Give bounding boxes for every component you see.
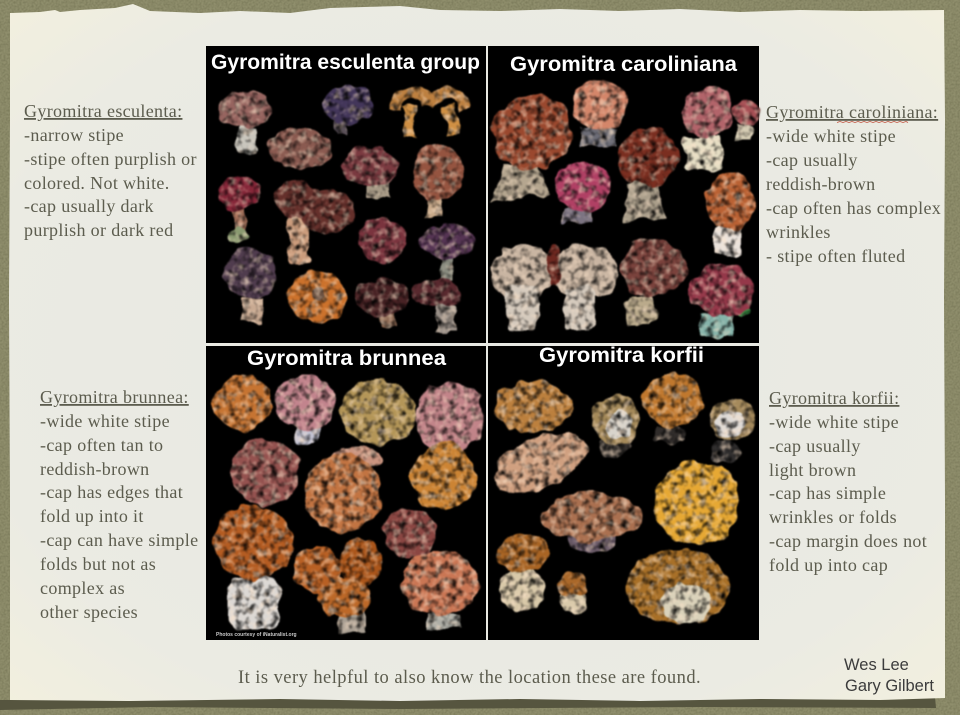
mushrooms: caroliniana <box>490 80 761 336</box>
text block: korfii notes: Gyromitra korfii: <box>769 388 899 408</box>
panel: Gyromitra brunnea <box>206 346 486 640</box>
mushrooms: korfii <box>484 373 756 625</box>
text block: brunnea notes: reddish-brown <box>40 459 150 479</box>
mushroom 1 <box>214 374 270 432</box>
mushroom 9 <box>620 239 686 324</box>
mushroom 5 <box>709 399 756 464</box>
mushroom 1 <box>494 381 572 433</box>
mushroom 14 <box>412 278 462 332</box>
mushroom 9 <box>357 217 407 263</box>
text block: korfii notes <box>769 388 927 575</box>
photo credit: Photos courtesy of iNaturalist.org <box>216 632 297 638</box>
mushroom 5 <box>733 100 761 139</box>
mushroom 10 <box>691 263 755 336</box>
mushroom 8 <box>274 180 356 265</box>
text block: korfii notes: light brown <box>769 460 856 480</box>
text block: brunnea notes: other species <box>40 602 138 622</box>
mushroom 4 <box>644 373 702 445</box>
mushroom 4 <box>269 127 331 169</box>
mushroom 6 <box>556 161 610 223</box>
text block: caroliniana notes: Gyromitra caroliniana: <box>766 102 938 122</box>
mushroom 2 <box>324 85 374 136</box>
text block: esculenta notes: Gyromitra esculenta: <box>24 101 182 121</box>
text block: korfii notes: -cap has simple <box>769 483 886 503</box>
title: brunnea: Gyromitra brunnea <box>247 347 446 370</box>
mushroom 2 <box>573 80 627 146</box>
mushroom 2 <box>274 375 336 444</box>
mushroom 12 <box>289 272 347 324</box>
text block: brunnea notes: -cap has edges that <box>40 482 183 502</box>
mushroom 3 <box>594 394 640 456</box>
mushroom 13 <box>357 279 409 327</box>
bottom paper shadow <box>0 697 936 710</box>
mushroom 1 <box>219 91 271 155</box>
text block: caroliniana notes <box>766 102 941 266</box>
title: caroliniana: Gyromitra caroliniana <box>510 53 737 76</box>
mushroom 11 <box>223 248 277 322</box>
text block: brunnea notes: -wide white stipe <box>40 411 170 431</box>
footer note: It is very helpful to also know the location these are found. <box>238 668 701 688</box>
text block: caroliniana notes: -cap often has complex <box>766 198 941 218</box>
mushroom 10 <box>422 225 474 281</box>
mushroom 10 <box>293 538 381 632</box>
text block: brunnea notes: -cap can have simple <box>40 530 198 550</box>
credits: Gary Gilbert <box>845 677 934 695</box>
mushroom 11 <box>401 551 479 630</box>
credits: Wes Lee <box>844 656 909 674</box>
text block: esculenta notes: -stipe often purplish or <box>24 149 197 169</box>
text block: brunnea notes: complex as <box>40 578 125 598</box>
mushroom 5 <box>231 438 299 506</box>
text block: korfii notes: -wide white stipe <box>769 412 899 432</box>
mushroom 8 <box>384 507 436 559</box>
mushroom 9 <box>214 506 292 628</box>
text block: caroliniana notes: -cap usually <box>766 150 858 170</box>
mushroom 7 <box>543 493 641 553</box>
mushroom 10 <box>627 549 729 625</box>
mushroom 6 <box>413 144 463 217</box>
mushroom 3 <box>618 128 678 222</box>
mushrooms: brunnea <box>214 374 484 632</box>
panel: Gyromitra esculenta group <box>206 46 486 343</box>
text block: korfii notes: -cap margin does not <box>769 531 927 551</box>
mushroom 5 <box>341 147 399 198</box>
mushroom 3 <box>340 380 416 446</box>
text block: esculenta notes: colored. Not white. <box>24 173 170 193</box>
mushroom 1 <box>491 95 573 202</box>
mushroom 8 <box>497 534 549 613</box>
text block: caroliniana notes: -wide white stipe <box>766 126 896 146</box>
text block: esculenta notes: purplish or dark red <box>24 220 173 240</box>
title: esculenta group: Gyromitra esculenta group <box>211 51 480 74</box>
mushroom 3: sectioned pair <box>394 92 466 138</box>
text block: esculenta notes: -narrow stipe <box>24 125 124 145</box>
text block: korfii notes: fold up into cap <box>769 555 888 575</box>
mushrooms: esculenta <box>218 85 474 332</box>
mushroom 6 <box>654 461 740 545</box>
mushroom 4 <box>416 381 484 453</box>
text block: korfii notes: -cap usually <box>769 436 861 456</box>
mushroom 6 <box>304 447 382 532</box>
panel: Gyromitra caroliniana <box>488 46 761 343</box>
mushroom 7 <box>705 173 755 254</box>
mushroom 9 <box>558 573 588 615</box>
mushroom 7 <box>410 443 476 511</box>
text block: esculenta notes: -cap usually dark <box>24 196 154 216</box>
text block: brunnea notes: fold up into it <box>40 506 144 526</box>
mushroom 4 <box>682 87 732 170</box>
mushroom 8: sectioned pair <box>490 244 618 330</box>
text block: brunnea notes <box>40 387 198 622</box>
panel: Gyromitra korfii <box>484 344 759 640</box>
text block: caroliniana notes: wrinkles <box>766 222 831 242</box>
text block: brunnea notes: -cap often tan to <box>40 435 163 455</box>
text block: brunnea notes: folds but not as <box>40 554 156 574</box>
text block: brunnea notes: Gyromitra brunnea: <box>40 387 189 407</box>
title: korfii: Gyromitra korfii <box>539 344 704 367</box>
mushroom 7 <box>218 175 262 244</box>
mushroom 2 <box>484 420 596 506</box>
text block: korfii notes: wrinkles or folds <box>769 507 897 527</box>
text block: caroliniana notes: - stipe often fluted <box>766 246 905 266</box>
credits <box>844 656 934 695</box>
text block: esculenta notes <box>24 101 197 240</box>
text block: caroliniana notes: reddish-brown <box>766 174 876 194</box>
